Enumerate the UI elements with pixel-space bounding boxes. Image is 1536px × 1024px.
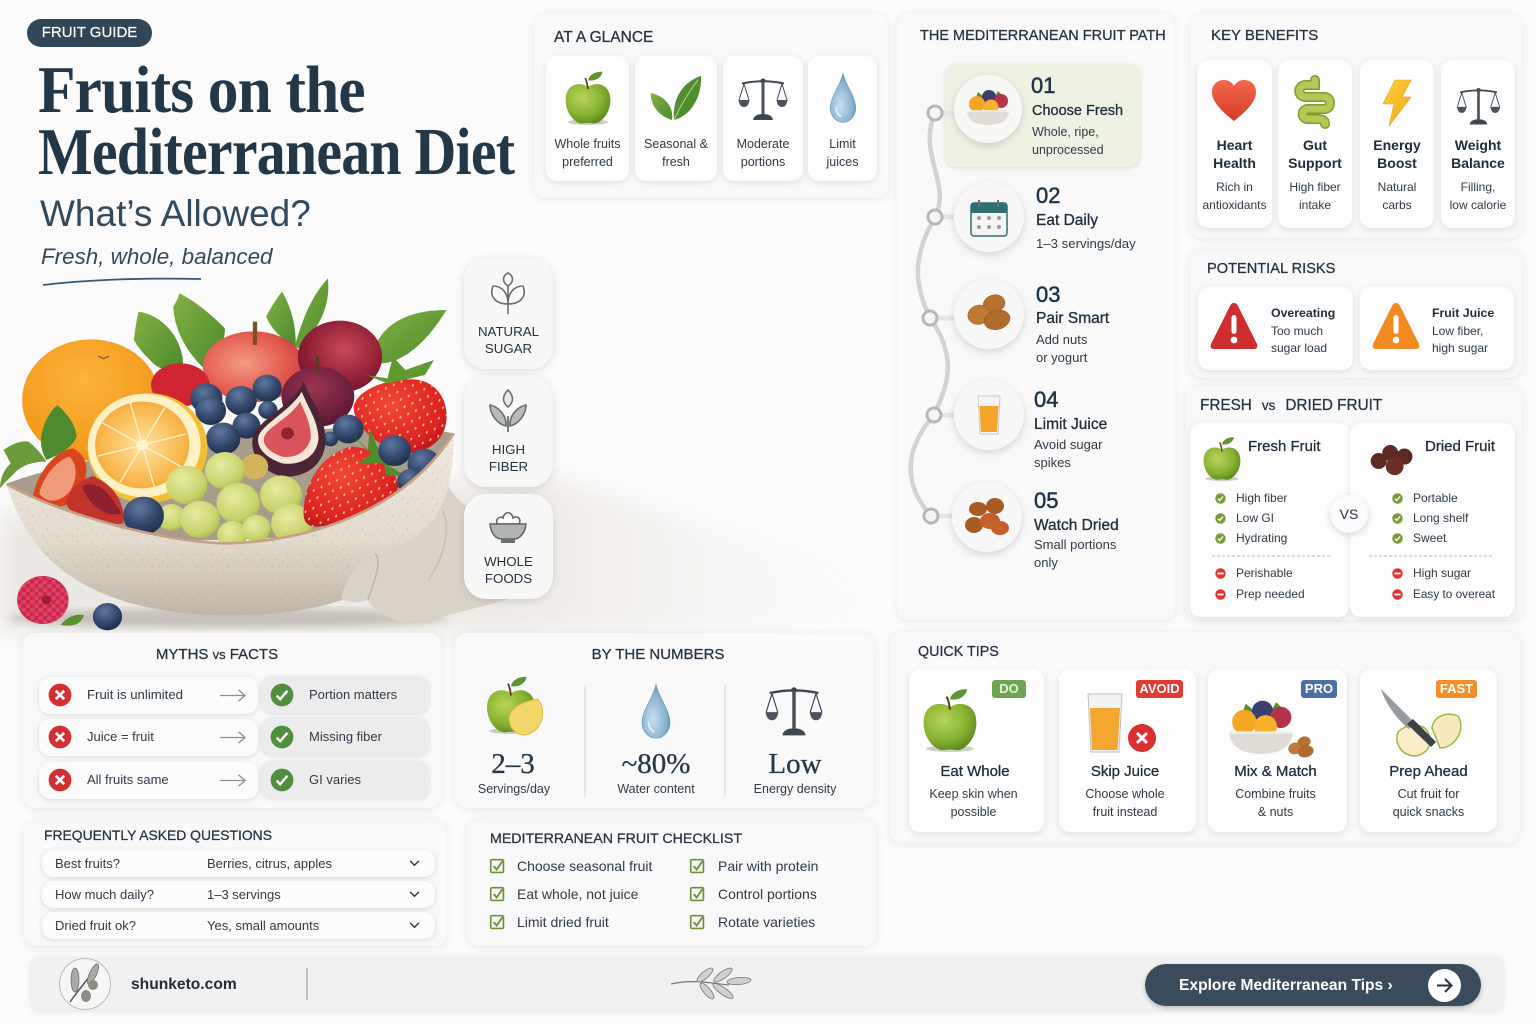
title: Overeating: [1271, 306, 1335, 320]
description: unprocessed: [1032, 143, 1104, 157]
panel: key benefits: [1190, 14, 1522, 238]
text: & nuts: [1258, 805, 1293, 819]
checklist right column: Pair with protein: [718, 858, 818, 874]
title: Weight: [1455, 137, 1501, 153]
pill: natural sugar: [464, 258, 553, 369]
question: How much daily?: [55, 887, 154, 902]
description: Whole, ripe,: [1032, 125, 1099, 139]
description: only: [1034, 555, 1058, 570]
step 03: [952, 282, 1110, 365]
description: Small portions: [1034, 537, 1116, 552]
text: portions: [741, 155, 785, 169]
card: moderate portions: [723, 56, 803, 181]
text: [1059, 785, 1191, 821]
loose berries: [17, 576, 69, 624]
strawberry top: [354, 357, 447, 453]
panel: potential risks: [1190, 250, 1522, 378]
arrow: [219, 731, 247, 744]
title: Balance: [1451, 155, 1505, 171]
label: [478, 324, 539, 356]
answer: 1–3 servings: [207, 887, 281, 902]
panel: by the numbers: [455, 633, 874, 808]
stat: energy: [735, 671, 855, 801]
name: Watch Dried: [1034, 517, 1119, 534]
description: [1034, 537, 1116, 570]
blueberry front: [123, 497, 164, 535]
text: Choose whole: [1085, 787, 1165, 801]
heading: FREQUENTLY ASKED QUESTIONS: [44, 827, 272, 843]
note: High fiber: [1289, 180, 1341, 194]
icon: [270, 768, 294, 792]
text: [826, 137, 858, 169]
badge: [992, 680, 1026, 698]
note: low calorie: [1450, 198, 1506, 212]
step 04: [952, 387, 1107, 470]
stat: water: [600, 671, 720, 801]
title: Mediterranean Diet: [38, 115, 514, 189]
pros: High fiber: [1236, 491, 1287, 505]
path connector: [908, 104, 954, 524]
icon: dried fruit: [1368, 445, 1416, 477]
orange: [22, 339, 160, 461]
arrow button: [1428, 969, 1461, 1002]
icon: [270, 683, 294, 707]
note: Too much: [1271, 324, 1323, 338]
myth row 3: [39, 762, 258, 799]
illustration: fruit bowl: [0, 278, 508, 630]
label: Servings/day: [478, 782, 550, 796]
icon: leaves: [650, 76, 702, 120]
label: [489, 442, 528, 474]
text: [1432, 303, 1510, 358]
label: Energy density: [754, 782, 836, 796]
icon: scale: [1454, 84, 1503, 128]
grapes: [157, 452, 312, 549]
text: [1441, 135, 1515, 220]
name: Choose Fresh: [1032, 103, 1123, 119]
title: Dried Fruit: [1425, 438, 1495, 455]
background marble table: [0, 476, 693, 636]
napkin: [341, 487, 516, 622]
icon: juice: [954, 380, 1024, 450]
title: Eat Whole: [940, 763, 1010, 780]
chevron: [409, 860, 420, 867]
chevron: [409, 922, 420, 929]
card: fresh fruit: [1190, 423, 1350, 617]
pros: Hydrating: [1236, 531, 1287, 545]
note: [1432, 323, 1488, 357]
vs badge: [1330, 495, 1368, 533]
text: GI varies: [309, 772, 361, 787]
icon: heart: [1212, 80, 1256, 121]
myth row 2: [39, 719, 258, 756]
description: [1036, 332, 1088, 365]
icon: apple: [566, 72, 610, 125]
label: FOODS: [485, 571, 532, 586]
icon: drop: [830, 73, 856, 123]
value: ~80%: [622, 748, 690, 780]
text: Combine fruits: [1235, 787, 1316, 801]
text: fruit instead: [1093, 805, 1157, 819]
tagline: Fresh, whole, balanced: [41, 244, 273, 269]
text: [1360, 785, 1497, 821]
icon: calendar: [954, 182, 1024, 252]
answer: Berries, citrus, apples: [207, 856, 332, 871]
badge: PRO: [1305, 681, 1333, 696]
icon: gut: [1294, 75, 1335, 129]
note: [1441, 178, 1515, 214]
heading: MYTHS vs FACTS: [156, 646, 278, 663]
heading: THE MEDITERRANEAN FRUIT PATH: [920, 28, 1166, 44]
subtitle: What’s Allowed?: [40, 193, 311, 234]
text: [1202, 137, 1267, 212]
description: Avoid sugar: [1034, 437, 1102, 452]
cons: Perishable: [1236, 566, 1293, 580]
number: 03: [1036, 282, 1060, 307]
panel: mediterranean fruit checklist: [467, 820, 876, 946]
pros: [1392, 488, 1482, 548]
label: FIBER: [489, 459, 528, 474]
icon: knife and apple: [1380, 688, 1464, 756]
icon: bowl: [489, 512, 527, 543]
icon: [48, 683, 72, 707]
title: Skip Juice: [1091, 763, 1159, 780]
chevron: [409, 891, 420, 898]
site name: shunketo.com: [131, 976, 237, 993]
note: carbs: [1382, 198, 1412, 212]
text: fresh: [662, 155, 690, 169]
note: Low fiber,: [1432, 324, 1483, 338]
title: Mix & Match: [1234, 763, 1317, 780]
label: SUGAR: [485, 341, 532, 356]
panel: the mediterranean fruit path: [897, 14, 1175, 620]
label: Water content: [617, 782, 695, 796]
text: Fruit is unlimited: [87, 687, 183, 702]
label: NATURAL: [478, 324, 539, 339]
title: Fruit Juice: [1432, 306, 1494, 320]
pill: whole foods: [464, 494, 553, 599]
name: Eat Daily: [1036, 212, 1098, 229]
stat: servings: [469, 671, 579, 801]
card: limit juices: [808, 56, 877, 181]
note: antioxidants: [1202, 198, 1267, 212]
pros: Low GI: [1236, 511, 1274, 525]
text: [554, 137, 620, 169]
question: Dried fruit ok?: [55, 918, 136, 933]
button: [1145, 964, 1481, 1006]
faq row 1: [42, 850, 435, 877]
checklist left column: [489, 856, 679, 940]
icon: bolt: [1382, 80, 1412, 126]
leaves back: [134, 278, 446, 371]
text: Whole fruits: [554, 137, 620, 151]
card: mix and match: [1208, 669, 1347, 832]
number: 05: [1034, 488, 1058, 513]
text: preferred: [562, 155, 613, 169]
card: fruit juice: [1360, 287, 1514, 370]
icon: apple with slice: [481, 671, 547, 739]
icon: dried fruit: [952, 482, 1022, 552]
card: skip juice: [1059, 669, 1196, 832]
text: Juice = fruit: [87, 729, 154, 744]
number: 04: [1034, 387, 1058, 412]
question: Best fruits?: [55, 856, 120, 871]
pros: [1215, 488, 1305, 548]
checklist right column: [689, 856, 859, 940]
title: [38, 53, 515, 189]
heading: MEDITERRANEAN FRUIT CHECKLIST: [490, 831, 742, 847]
strawberry front: [304, 428, 407, 527]
name: Limit Juice: [1034, 416, 1107, 433]
badge: FAST: [1440, 681, 1473, 696]
title: [1213, 137, 1256, 171]
arrow: [219, 774, 247, 787]
fact row 2: [261, 718, 429, 755]
text: possible: [951, 805, 996, 819]
vs badge: VS: [1340, 506, 1358, 522]
label: WHOLE: [484, 554, 533, 569]
text: [1208, 785, 1343, 821]
checklist right column: Control portions: [718, 886, 817, 902]
note: Rich in: [1216, 180, 1253, 194]
note: [1271, 323, 1327, 357]
text: Missing fiber: [309, 729, 382, 744]
description: [1032, 125, 1104, 157]
title: Energy: [1373, 137, 1421, 153]
text: All fruits same: [87, 772, 169, 787]
card: energy boost: [1360, 60, 1434, 228]
pros: Sweet: [1413, 531, 1446, 545]
icon: sprout: [490, 272, 526, 314]
heading: KEY BENEFITS: [1211, 27, 1318, 44]
apples: [203, 331, 304, 402]
cons: [1215, 568, 1305, 610]
icon: juice with cross: [1087, 693, 1157, 755]
fig: [252, 382, 326, 477]
checklist left column: Limit dried fruit: [517, 914, 609, 930]
note: intake: [1299, 198, 1331, 212]
pros: Long shelf: [1413, 511, 1468, 525]
label: [484, 554, 533, 586]
step 01: [952, 73, 1123, 157]
icon: fruit bowl: [954, 75, 1022, 143]
panel: frequently asked questions: [24, 820, 447, 946]
note: [1289, 180, 1341, 212]
badge: [1436, 680, 1477, 698]
myth row 1: [39, 677, 258, 714]
pill: high fiber: [464, 376, 553, 487]
description: spikes: [1034, 455, 1071, 470]
title: [1288, 137, 1342, 171]
description: or yogurt: [1036, 350, 1087, 365]
highlight: step 01: [945, 64, 1140, 167]
blood orange slice and leaves at left: [41, 405, 77, 460]
icon: [48, 768, 72, 792]
tagline underline: [42, 278, 201, 286]
text: juices: [827, 155, 858, 169]
card: overeating: [1198, 287, 1353, 370]
title: [1441, 136, 1515, 172]
category pill: FRUIT GUIDE: [42, 24, 137, 41]
note: high sugar: [1432, 341, 1488, 355]
name: Pair Smart: [1036, 310, 1109, 327]
text: Limit: [829, 137, 856, 151]
text: [644, 137, 708, 169]
badge: AVOID: [1139, 681, 1180, 696]
card: prep ahead: [1360, 669, 1497, 832]
text: [737, 137, 789, 169]
button label: Explore Mediterranean Tips ›: [1179, 977, 1393, 994]
card: whole fruits: [546, 56, 629, 181]
text: [1373, 137, 1421, 212]
bowl body: [6, 433, 454, 615]
title: [1373, 137, 1421, 171]
cons: Easy to overeat: [1413, 587, 1495, 601]
step 05: [950, 488, 1119, 570]
title: Prep Ahead: [1389, 763, 1468, 780]
description: Add nuts: [1036, 332, 1087, 347]
faq row 2: [42, 881, 435, 908]
description: [1034, 437, 1102, 470]
icon: warning orange: [1372, 302, 1420, 350]
number: 01: [1031, 73, 1055, 98]
icon: warning red: [1210, 302, 1258, 350]
title: Heart: [1217, 137, 1252, 153]
arrow: [219, 689, 247, 702]
badge: DO: [999, 681, 1019, 696]
card: gut support: [1278, 60, 1352, 228]
category pill: [27, 19, 152, 47]
text: [1271, 303, 1349, 358]
heading: QUICK TIPS: [918, 644, 999, 660]
badge: [1301, 680, 1337, 698]
note: sugar load: [1271, 341, 1327, 355]
answer: Yes, small amounts: [207, 918, 319, 933]
card: eat whole: [909, 669, 1044, 832]
card: weight balance: [1441, 60, 1515, 228]
card: seasonal: [635, 56, 717, 181]
icon: fruit bowl and nuts: [1223, 697, 1315, 763]
footer bar: [31, 957, 1503, 1010]
checklist left column: Choose seasonal fruit: [517, 858, 652, 874]
text: [1288, 137, 1342, 212]
icon: [48, 725, 72, 749]
pros: Portable: [1413, 491, 1458, 505]
icon: leaves: [489, 389, 527, 432]
logo: [58, 958, 112, 1010]
icon: drop: [636, 683, 676, 741]
card: dried fruit: [1350, 423, 1515, 617]
panel: at a glance: [534, 14, 888, 198]
icon: apple: [1199, 435, 1245, 481]
lemon half: [74, 380, 221, 516]
value: 2–3: [491, 748, 535, 780]
icon: apple: [917, 685, 983, 753]
fact row 3: [261, 761, 429, 798]
note: Natural: [1378, 180, 1416, 194]
heading: FRESH vs DRIED FRUIT: [1200, 397, 1382, 414]
card: heart health: [1197, 60, 1272, 228]
label: HIGH: [492, 442, 525, 457]
note: [1202, 180, 1267, 212]
title: Fresh Fruit: [1248, 438, 1321, 455]
panel: fresh vs dried fruit: [1186, 386, 1522, 620]
title: Health: [1213, 155, 1256, 171]
text: Keep skin when: [929, 787, 1018, 801]
cons: High sugar: [1413, 566, 1471, 580]
heading: POTENTIAL RISKS: [1207, 261, 1335, 277]
description: 1–3 servings/day: [1036, 236, 1136, 251]
step 02: [952, 183, 1136, 258]
cons: [1392, 568, 1502, 610]
title: Boost: [1377, 155, 1417, 171]
panel: quick tips: [890, 632, 1520, 843]
title: Fruits on the: [38, 53, 365, 127]
icon: scale: [738, 78, 788, 120]
title: Gut: [1303, 137, 1327, 153]
icon: scale: [760, 682, 828, 740]
blueberries: [190, 375, 364, 455]
text: Seasonal &: [644, 137, 708, 151]
icon: [270, 725, 294, 749]
cons: Prep needed: [1236, 587, 1305, 601]
panel: myths vs facts: [23, 633, 441, 808]
checklist right column: Rotate varieties: [718, 914, 815, 930]
text: quick snacks: [1393, 805, 1464, 819]
note: [1378, 180, 1416, 212]
value: Low: [768, 748, 822, 780]
heading: AT A GLANCE: [554, 29, 653, 46]
fact row 1: [261, 676, 429, 713]
title: Support: [1288, 155, 1342, 171]
note: Filling,: [1461, 180, 1495, 194]
text: Moderate: [737, 137, 789, 151]
text: Portion matters: [309, 687, 397, 702]
text: [909, 785, 1038, 821]
text: Cut fruit for: [1398, 787, 1459, 801]
icon: nuts: [954, 279, 1024, 349]
checklist left column: Eat whole, not juice: [517, 886, 638, 902]
faq row 3: [42, 912, 435, 939]
heading: BY THE NUMBERS: [592, 646, 724, 663]
number: 02: [1036, 183, 1060, 208]
icon: olive sprig: [671, 969, 755, 999]
